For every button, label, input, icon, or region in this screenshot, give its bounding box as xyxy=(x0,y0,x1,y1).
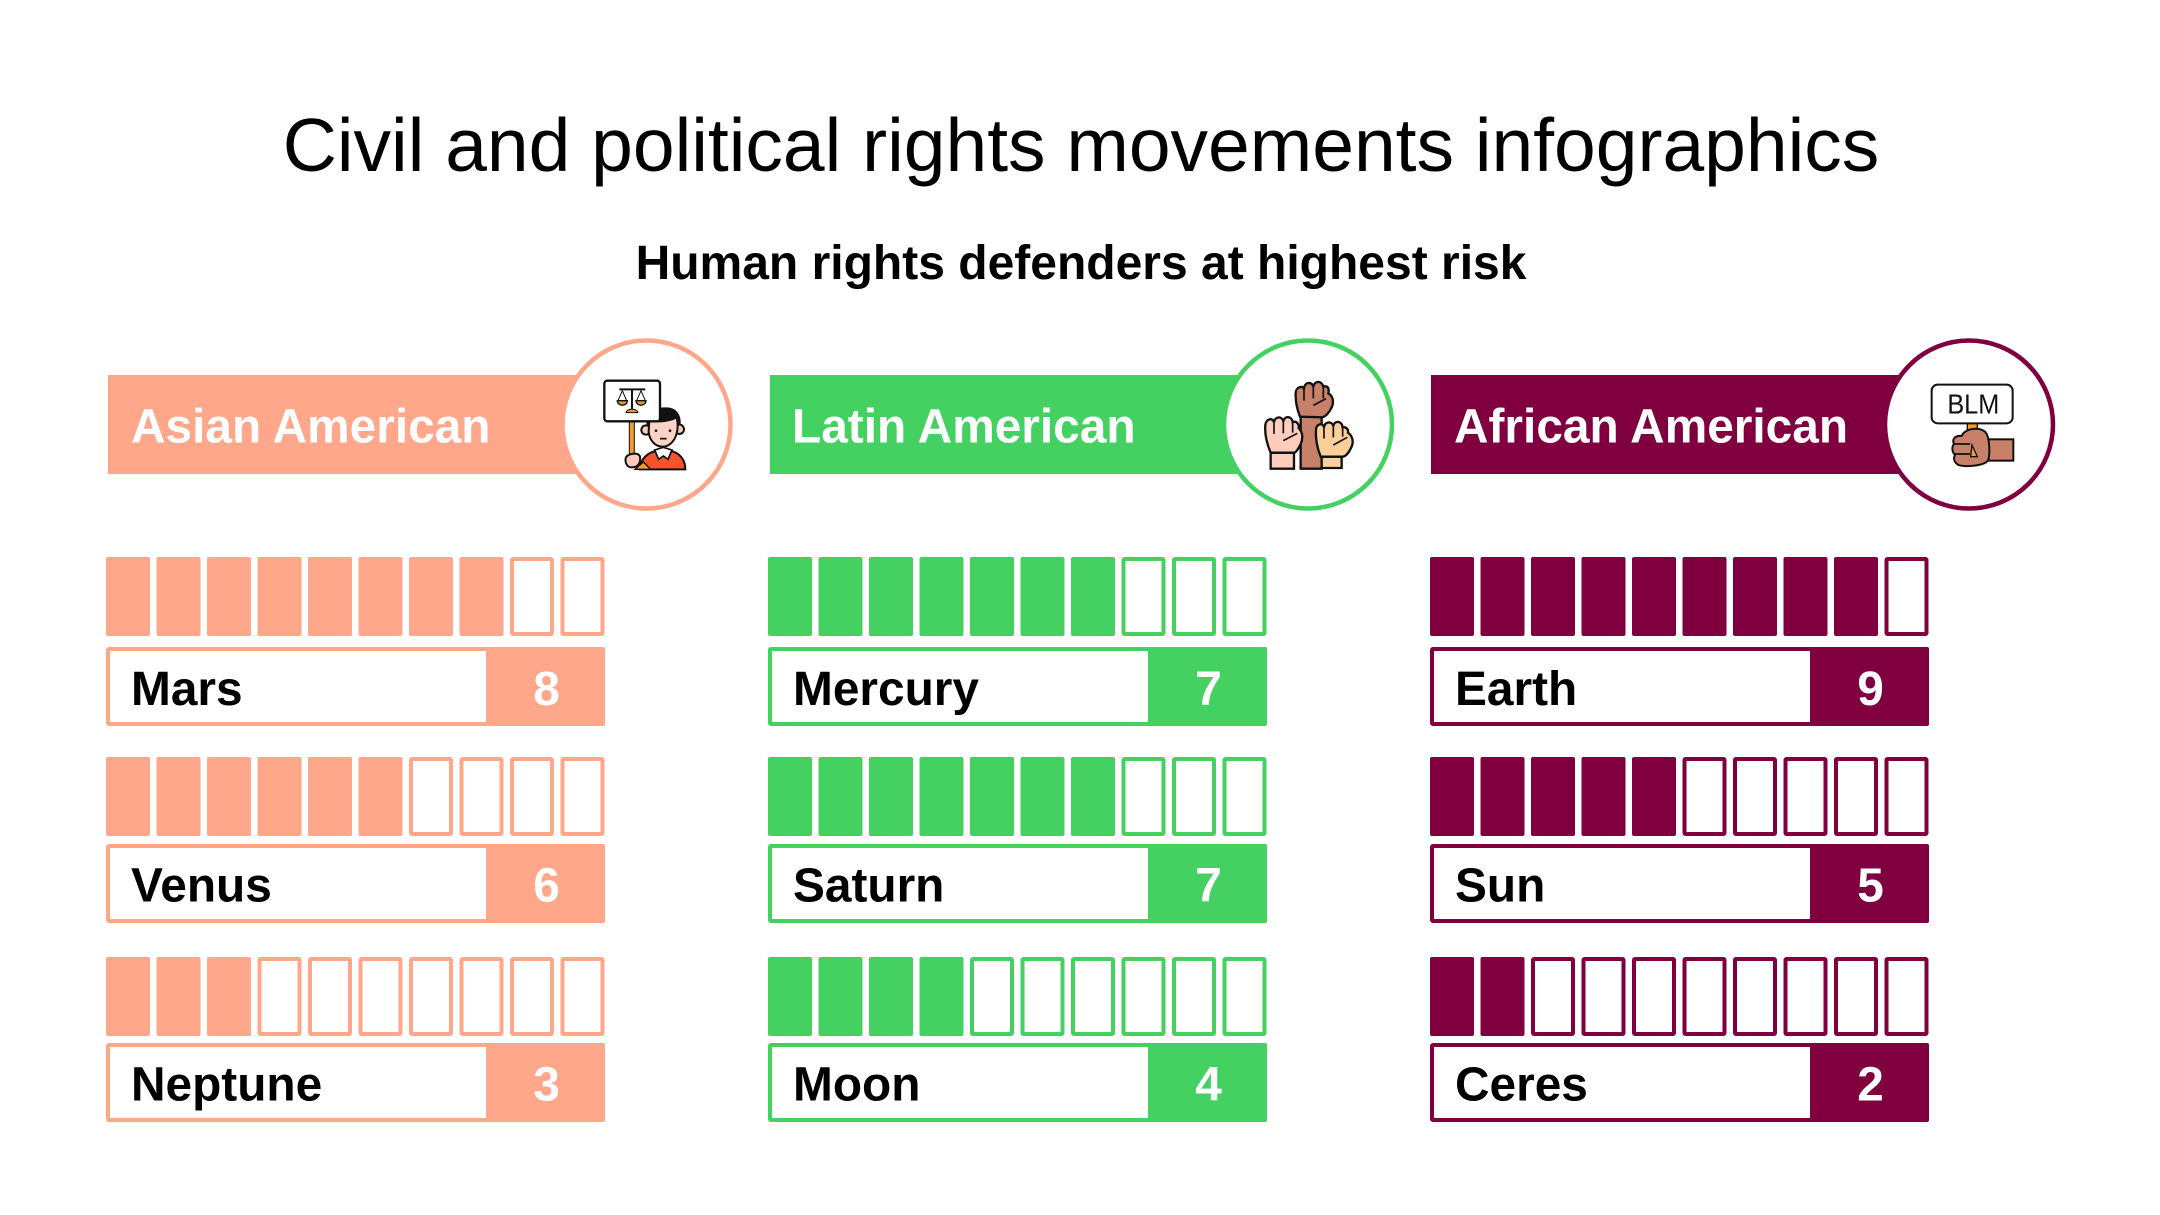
label: Mercury xyxy=(793,663,979,716)
label: 8 xyxy=(533,663,560,716)
header: African American xyxy=(1431,340,2053,508)
label: Neptune xyxy=(131,1058,322,1112)
label: Venus xyxy=(131,860,272,912)
panel: African American xyxy=(1430,340,2053,1122)
label xyxy=(1432,647,1929,726)
meter xyxy=(768,957,1264,1036)
meter xyxy=(106,557,602,636)
label: 3 xyxy=(533,1058,560,1112)
row: Mars 8 xyxy=(106,557,605,726)
label: 7 xyxy=(1195,663,1222,716)
icon: BLM sign in fist: BLM xyxy=(1947,389,1999,420)
header: African American: African American xyxy=(1454,400,1848,454)
meter xyxy=(768,557,1264,636)
label: Moon xyxy=(793,1058,920,1112)
icon: person holding justice sign xyxy=(604,381,685,469)
label: 9 xyxy=(1857,663,1884,716)
label: Earth xyxy=(1455,663,1577,716)
label: 2 xyxy=(1857,1058,1884,1112)
label xyxy=(108,1043,605,1122)
header: Latin American xyxy=(770,340,1392,508)
header: Latin American: Latin American xyxy=(792,400,1136,454)
label: Mars xyxy=(131,663,243,716)
label: 4 xyxy=(1195,1058,1222,1112)
meter xyxy=(106,757,602,836)
label xyxy=(108,647,605,726)
header: Asian American xyxy=(108,340,730,508)
row: Neptune 3 xyxy=(106,957,605,1122)
row: Saturn 7 xyxy=(768,757,1267,923)
icon: BLM sign in fist xyxy=(1932,385,2013,466)
label xyxy=(770,844,1267,923)
subtitle: Human rights defenders at highest risk xyxy=(636,237,1527,290)
label: 6 xyxy=(533,860,560,912)
row: Sun 5 xyxy=(1430,757,1929,923)
meter xyxy=(1430,557,1926,636)
label xyxy=(770,647,1267,726)
label xyxy=(108,844,605,923)
label: Ceres xyxy=(1455,1058,1588,1112)
panel: Latin American xyxy=(768,340,1392,1122)
label: 5 xyxy=(1857,860,1884,912)
meter xyxy=(1430,957,1926,1036)
title: Civil and political rights movements infographics xyxy=(283,103,1879,187)
panel: Asian American xyxy=(106,340,730,1122)
icon: raised fists xyxy=(1265,382,1353,469)
row: Mercury 7 xyxy=(768,557,1267,726)
meter xyxy=(1430,757,1926,836)
header: Asian American: Asian American xyxy=(131,400,491,454)
label xyxy=(1432,1043,1929,1122)
label: 7 xyxy=(1195,860,1222,912)
label: Sun xyxy=(1455,860,1545,912)
meter xyxy=(768,757,1264,836)
row: Ceres 2 xyxy=(1430,957,1929,1122)
row: Earth 9 xyxy=(1430,557,1929,726)
label xyxy=(1432,844,1929,923)
label xyxy=(770,1043,1267,1122)
label: Saturn xyxy=(793,860,944,912)
meter xyxy=(106,957,602,1036)
row: Moon 4 xyxy=(768,957,1267,1122)
row: Venus 6 xyxy=(106,757,605,923)
